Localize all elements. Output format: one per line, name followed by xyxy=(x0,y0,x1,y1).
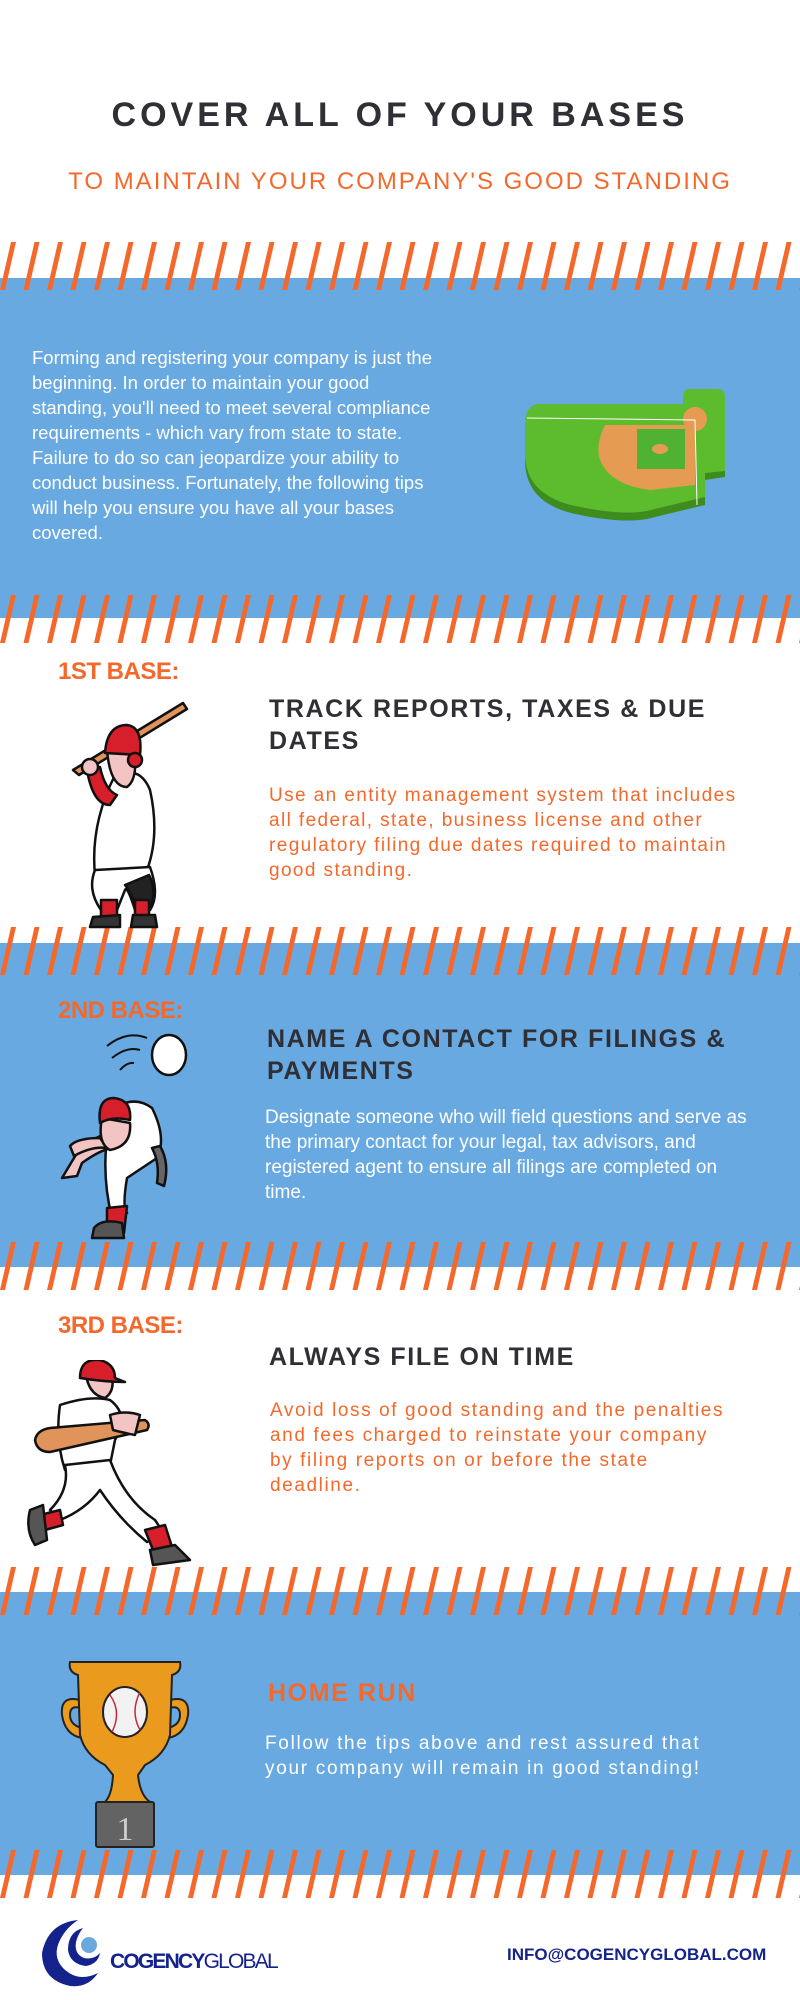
icon: pitcher xyxy=(60,1034,188,1240)
2nd base body: time. xyxy=(265,1182,306,1203)
3rd base body: by filing reports on or before the state xyxy=(270,1450,649,1471)
1st base body: regulatory filing due dates required to maintain xyxy=(269,835,727,856)
2nd base heading: PAYMENTS xyxy=(267,1057,415,1085)
icon: trophy: 1 xyxy=(116,1811,134,1848)
3rd base label: 3RD BASE: xyxy=(58,1312,183,1339)
1st base body: all federal, state, business license and other xyxy=(269,810,703,831)
3rd base body: deadline. xyxy=(270,1475,362,1496)
2nd base body: the primary contact for your legal, tax advisors, and xyxy=(265,1132,696,1153)
3rd base body xyxy=(270,1400,724,1496)
3rd base body: Avoid loss of good standing and the penalties xyxy=(270,1400,724,1421)
intro text xyxy=(32,347,432,543)
title: COVER ALL OF YOUR BASES xyxy=(112,96,688,134)
intro text: Forming and registering your company is just the xyxy=(32,347,432,368)
home run body: your company will remain in good standing! xyxy=(265,1758,701,1779)
1st base body: good standing. xyxy=(269,860,413,881)
intro text: will help you ensure you have all your bases xyxy=(32,497,394,518)
intro text: conduct business. Fortunately, the following tips xyxy=(32,472,423,493)
3rd base body: and fees charged to reinstate your company xyxy=(270,1425,708,1446)
stripe band 6 xyxy=(0,1850,800,1898)
logo text: COGENCYGLOBAL xyxy=(110,1950,277,1973)
footer logo xyxy=(42,1920,278,1986)
subtitle: TO MAINTAIN YOUR COMPANY'S GOOD STANDING xyxy=(68,168,732,195)
stripe band 5 xyxy=(0,1567,800,1615)
panel: 2nd base background xyxy=(0,943,800,1267)
stripe band 1 xyxy=(0,242,800,290)
home run heading: HOME RUN xyxy=(268,1679,417,1707)
1st base body: Use an entity management system that includes xyxy=(269,785,736,806)
2nd base body: Designate someone who will field questions and serve as xyxy=(265,1107,747,1128)
intro text: covered. xyxy=(32,522,103,543)
icon: baseball field xyxy=(525,389,725,520)
3rd base heading: ALWAYS FILE ON TIME xyxy=(269,1343,575,1371)
icon: logo mark xyxy=(42,1920,100,1986)
home run body: Follow the tips above and rest assured that xyxy=(265,1733,700,1754)
2nd base heading: NAME A CONTACT FOR FILINGS & xyxy=(267,1025,726,1053)
stripe band 2 xyxy=(0,595,800,643)
2nd base body: registered agent to ensure all filings are completed on xyxy=(265,1157,717,1178)
stripe band 4 xyxy=(0,1242,800,1290)
intro text: beginning. In order to maintain your good xyxy=(32,372,369,393)
1st base label: 1ST BASE: xyxy=(58,658,179,685)
icon: trophy xyxy=(60,1661,190,1848)
1st base heading: TRACK REPORTS, TAXES & DUE xyxy=(269,695,706,723)
1st base heading xyxy=(269,695,706,755)
panel: intro background xyxy=(0,278,800,618)
1st base heading: DATES xyxy=(269,727,360,755)
panel: home run background xyxy=(0,1592,800,1875)
intro text: requirements - which vary from state to state. xyxy=(32,422,402,443)
intro text: standing, you'll need to meet several compliance xyxy=(32,397,430,418)
1st base body xyxy=(269,785,736,881)
home run body xyxy=(265,1733,701,1779)
2nd base body xyxy=(265,1107,747,1203)
intro text: Failure to do so can jeopardize your ability to xyxy=(32,447,399,468)
2nd base label: 2ND BASE: xyxy=(58,997,183,1024)
stripe band 3 xyxy=(0,927,800,975)
icon: batter 3 xyxy=(27,1360,192,1566)
2nd base heading xyxy=(267,1025,726,1085)
icon: batter 1 xyxy=(72,702,188,928)
footer email: INFO@COGENCYGLOBAL.COM xyxy=(507,1945,766,1964)
